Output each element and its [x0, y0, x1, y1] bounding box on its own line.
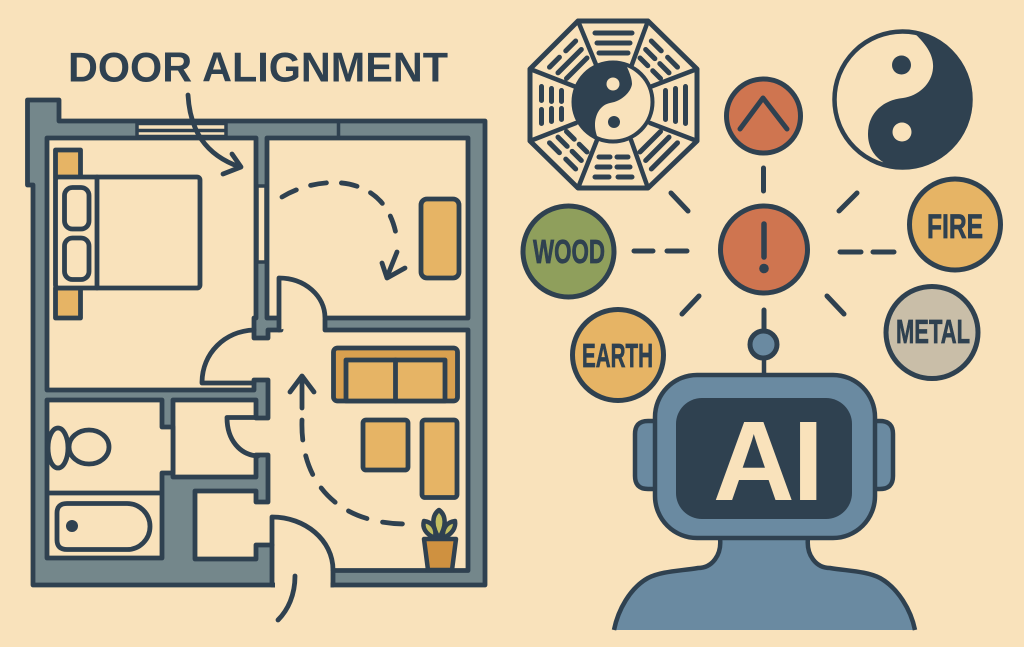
element: earth	[572, 310, 664, 400]
furniture: cabinet	[421, 199, 459, 278]
door swing: closet	[227, 418, 258, 456]
bathtub	[57, 504, 150, 550]
rooms and corridor	[47, 138, 468, 585]
bathroom walls	[47, 400, 173, 558]
bagua yin-yang	[572, 60, 654, 144]
element: fire	[910, 179, 1000, 270]
outer walls	[28, 100, 485, 585]
top window	[137, 124, 226, 136]
robot body	[614, 538, 915, 630]
door swing: entry	[272, 517, 333, 570]
entry gap	[275, 581, 330, 590]
connector dashes	[634, 168, 894, 330]
element: metal: METAL	[896, 314, 970, 351]
trigram: north	[595, 33, 632, 53]
element: wood	[523, 206, 614, 297]
trigram: south	[595, 157, 632, 177]
icon: exclamation circle	[720, 206, 808, 293]
icon: bagua octagon	[530, 21, 697, 188]
door swing: upper room	[279, 278, 325, 330]
furniture: ottoman	[363, 420, 408, 470]
arrow: door alignment pointer	[188, 95, 241, 174]
element: wood: WOOD	[533, 234, 605, 271]
toilet	[48, 428, 109, 468]
robot head	[655, 375, 875, 538]
element: fire: FIRE	[927, 208, 983, 246]
trigram: southwest	[550, 129, 590, 169]
arrow: entry path	[278, 576, 295, 620]
AI label: AI	[713, 398, 824, 524]
potted plant	[423, 510, 456, 570]
robot ears	[635, 421, 893, 489]
furniture: side seat	[422, 420, 457, 498]
element: earth: EARTH	[582, 338, 653, 375]
furniture: nightstands	[56, 150, 80, 318]
wall seam	[337, 122, 340, 137]
robot screen	[676, 398, 852, 519]
arrow: upper room dashed path	[282, 183, 405, 278]
icon: large yin-yang	[832, 29, 973, 170]
trigram: east	[666, 86, 686, 124]
door swing: bedroom	[202, 330, 254, 383]
title: door alignment: DOOR ALIGNMENT	[68, 44, 448, 90]
trigram: northwest	[550, 41, 590, 81]
arrow: living room dashed path	[290, 376, 410, 524]
trigram: northeast	[637, 41, 677, 81]
robot: AI figure	[614, 331, 915, 630]
icon: roof circle	[726, 79, 800, 153]
furniture: sofa	[334, 348, 458, 401]
robot antenna	[750, 331, 777, 375]
element: metal	[886, 286, 978, 378]
bagua spokes	[530, 21, 697, 188]
trigram: west	[542, 86, 562, 124]
trigram: southeast	[637, 129, 677, 169]
panel: floor plan	[28, 95, 485, 620]
furniture: bed	[56, 177, 200, 288]
side window	[257, 186, 266, 262]
